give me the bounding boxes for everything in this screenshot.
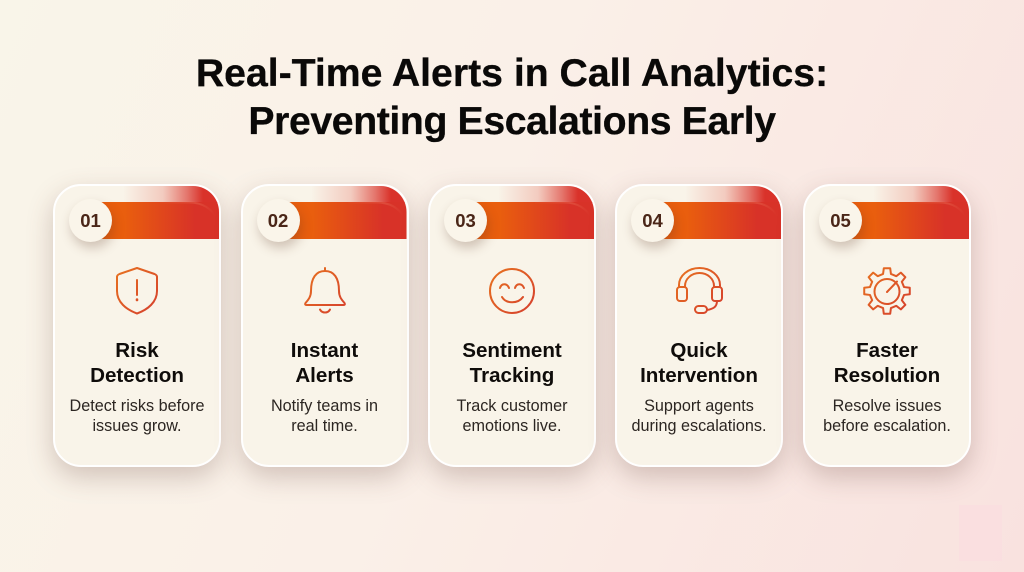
heading: Instant — [291, 339, 358, 362]
title — [196, 52, 828, 142]
description — [271, 397, 378, 435]
heading — [834, 339, 940, 386]
card header band — [102, 186, 219, 239]
icon: shield alert — [116, 267, 158, 314]
card header band — [476, 186, 594, 239]
description — [70, 397, 204, 435]
number badge 02: 02 — [268, 210, 288, 231]
panel: quick intervention — [615, 184, 783, 467]
panel: instant alerts — [240, 184, 408, 467]
panel: sentiment tracking — [428, 184, 596, 467]
panel: risk detection — [53, 184, 221, 467]
heading: Alerts — [295, 364, 354, 386]
description: during escalations. — [632, 417, 766, 435]
description — [456, 397, 568, 435]
heading: Sentiment — [462, 339, 562, 362]
number badge 05: 05 — [830, 210, 851, 231]
title: Preventing Escalations Early — [248, 100, 776, 142]
heading — [640, 339, 758, 386]
heading — [462, 339, 562, 386]
heading — [90, 339, 184, 386]
description — [632, 397, 766, 435]
description: Support agents — [644, 397, 754, 415]
card header band — [290, 186, 406, 239]
title: Real-Time Alerts in Call Analytics: — [196, 52, 828, 95]
number badge 01 — [69, 199, 112, 242]
heading: Intervention — [640, 364, 758, 386]
description: Resolve issues — [833, 397, 941, 415]
number badge 04 — [631, 199, 674, 242]
icon: gear with gauge — [863, 267, 911, 315]
number badge 01: 01 — [80, 210, 101, 231]
description: Detect risks before — [70, 397, 204, 415]
icon: bell — [304, 267, 346, 314]
heading: Resolution — [834, 364, 940, 386]
heading: Faster — [856, 339, 918, 362]
panel: faster resolution — [803, 184, 971, 467]
heading — [291, 339, 358, 386]
description: real time. — [291, 417, 358, 435]
background accent square — [959, 505, 1002, 561]
number badge 03 — [444, 199, 487, 242]
description: emotions live. — [463, 417, 561, 435]
icon: smiley face — [489, 268, 535, 314]
heading: Risk — [115, 339, 159, 362]
icon: headset — [676, 267, 723, 314]
description: Track customer — [457, 397, 567, 415]
card header band — [664, 186, 781, 239]
heading: Quick — [670, 339, 728, 362]
description: Notify teams in — [271, 397, 378, 415]
number badge 04: 04 — [642, 210, 663, 231]
description: issues grow. — [92, 417, 182, 435]
number badge 03: 03 — [455, 210, 476, 231]
card header band — [852, 186, 969, 239]
heading: Tracking — [470, 364, 554, 386]
description: before escalation. — [823, 417, 951, 435]
description — [823, 397, 951, 435]
heading: Detection — [90, 364, 184, 386]
number badge 02 — [256, 199, 300, 242]
number badge 05 — [819, 199, 862, 242]
